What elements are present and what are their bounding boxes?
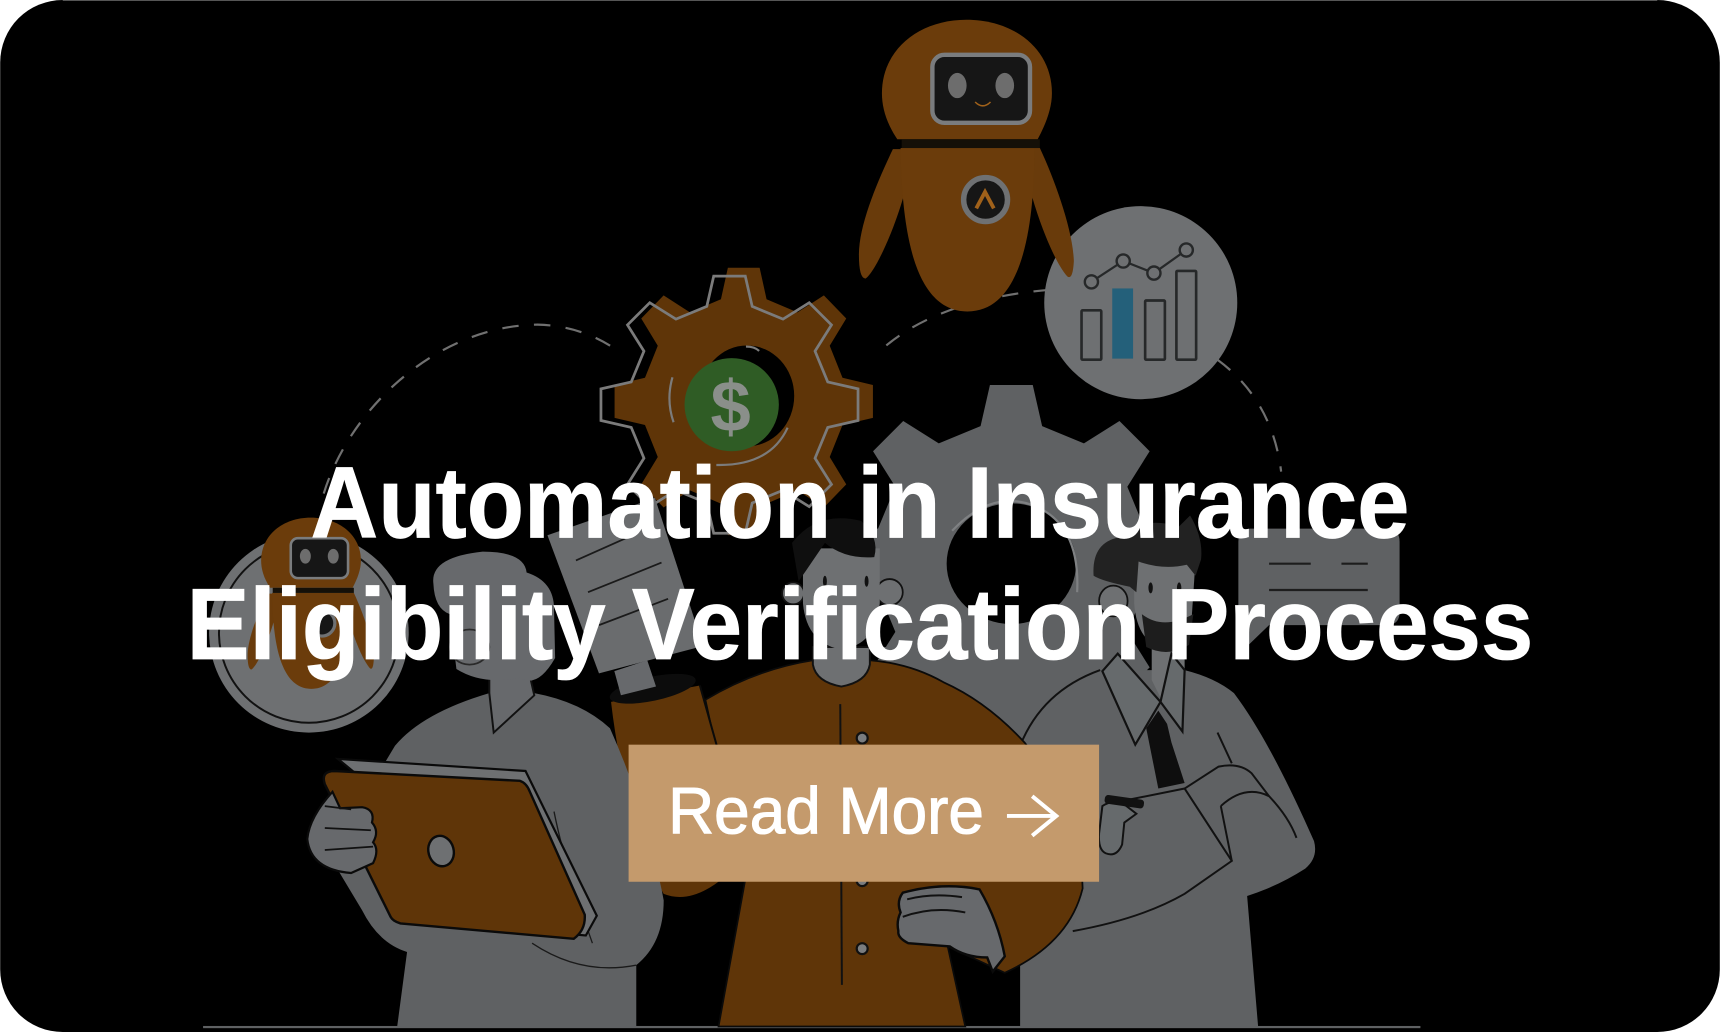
center man [607, 518, 1083, 1027]
illustration [203, 20, 1420, 1028]
right man head [1093, 515, 1201, 652]
ground line [203, 1026, 1420, 1028]
brown gear with dollar coin [601, 268, 873, 535]
woman hand [307, 792, 376, 873]
icon: chart circle [1044, 206, 1237, 399]
button: read more: Read More [668, 773, 984, 847]
robot large [859, 20, 1074, 311]
right man [1020, 515, 1315, 1027]
icon: arrow [1007, 796, 1056, 836]
center man hand [898, 886, 1005, 972]
center man head [782, 518, 903, 687]
icon: dollar coin [685, 358, 779, 451]
button: read more [629, 745, 1099, 882]
title: Automation in Insurance [311, 447, 1409, 559]
title: Eligibility Verification Process [187, 569, 1533, 681]
center man raised arm [607, 668, 724, 897]
dashed arc left [324, 325, 617, 494]
tablet [324, 759, 597, 939]
gray gear [837, 385, 1186, 757]
woman head [433, 552, 555, 733]
shirt placket and buttons [840, 704, 868, 985]
document held up [547, 498, 703, 695]
icon: dollar coin: $ [710, 366, 751, 447]
dashed arc right [886, 290, 1281, 472]
icon: small robot badge [209, 518, 409, 733]
woman with tablet [307, 552, 664, 1027]
speech document right [1238, 529, 1400, 655]
title [187, 447, 1533, 681]
